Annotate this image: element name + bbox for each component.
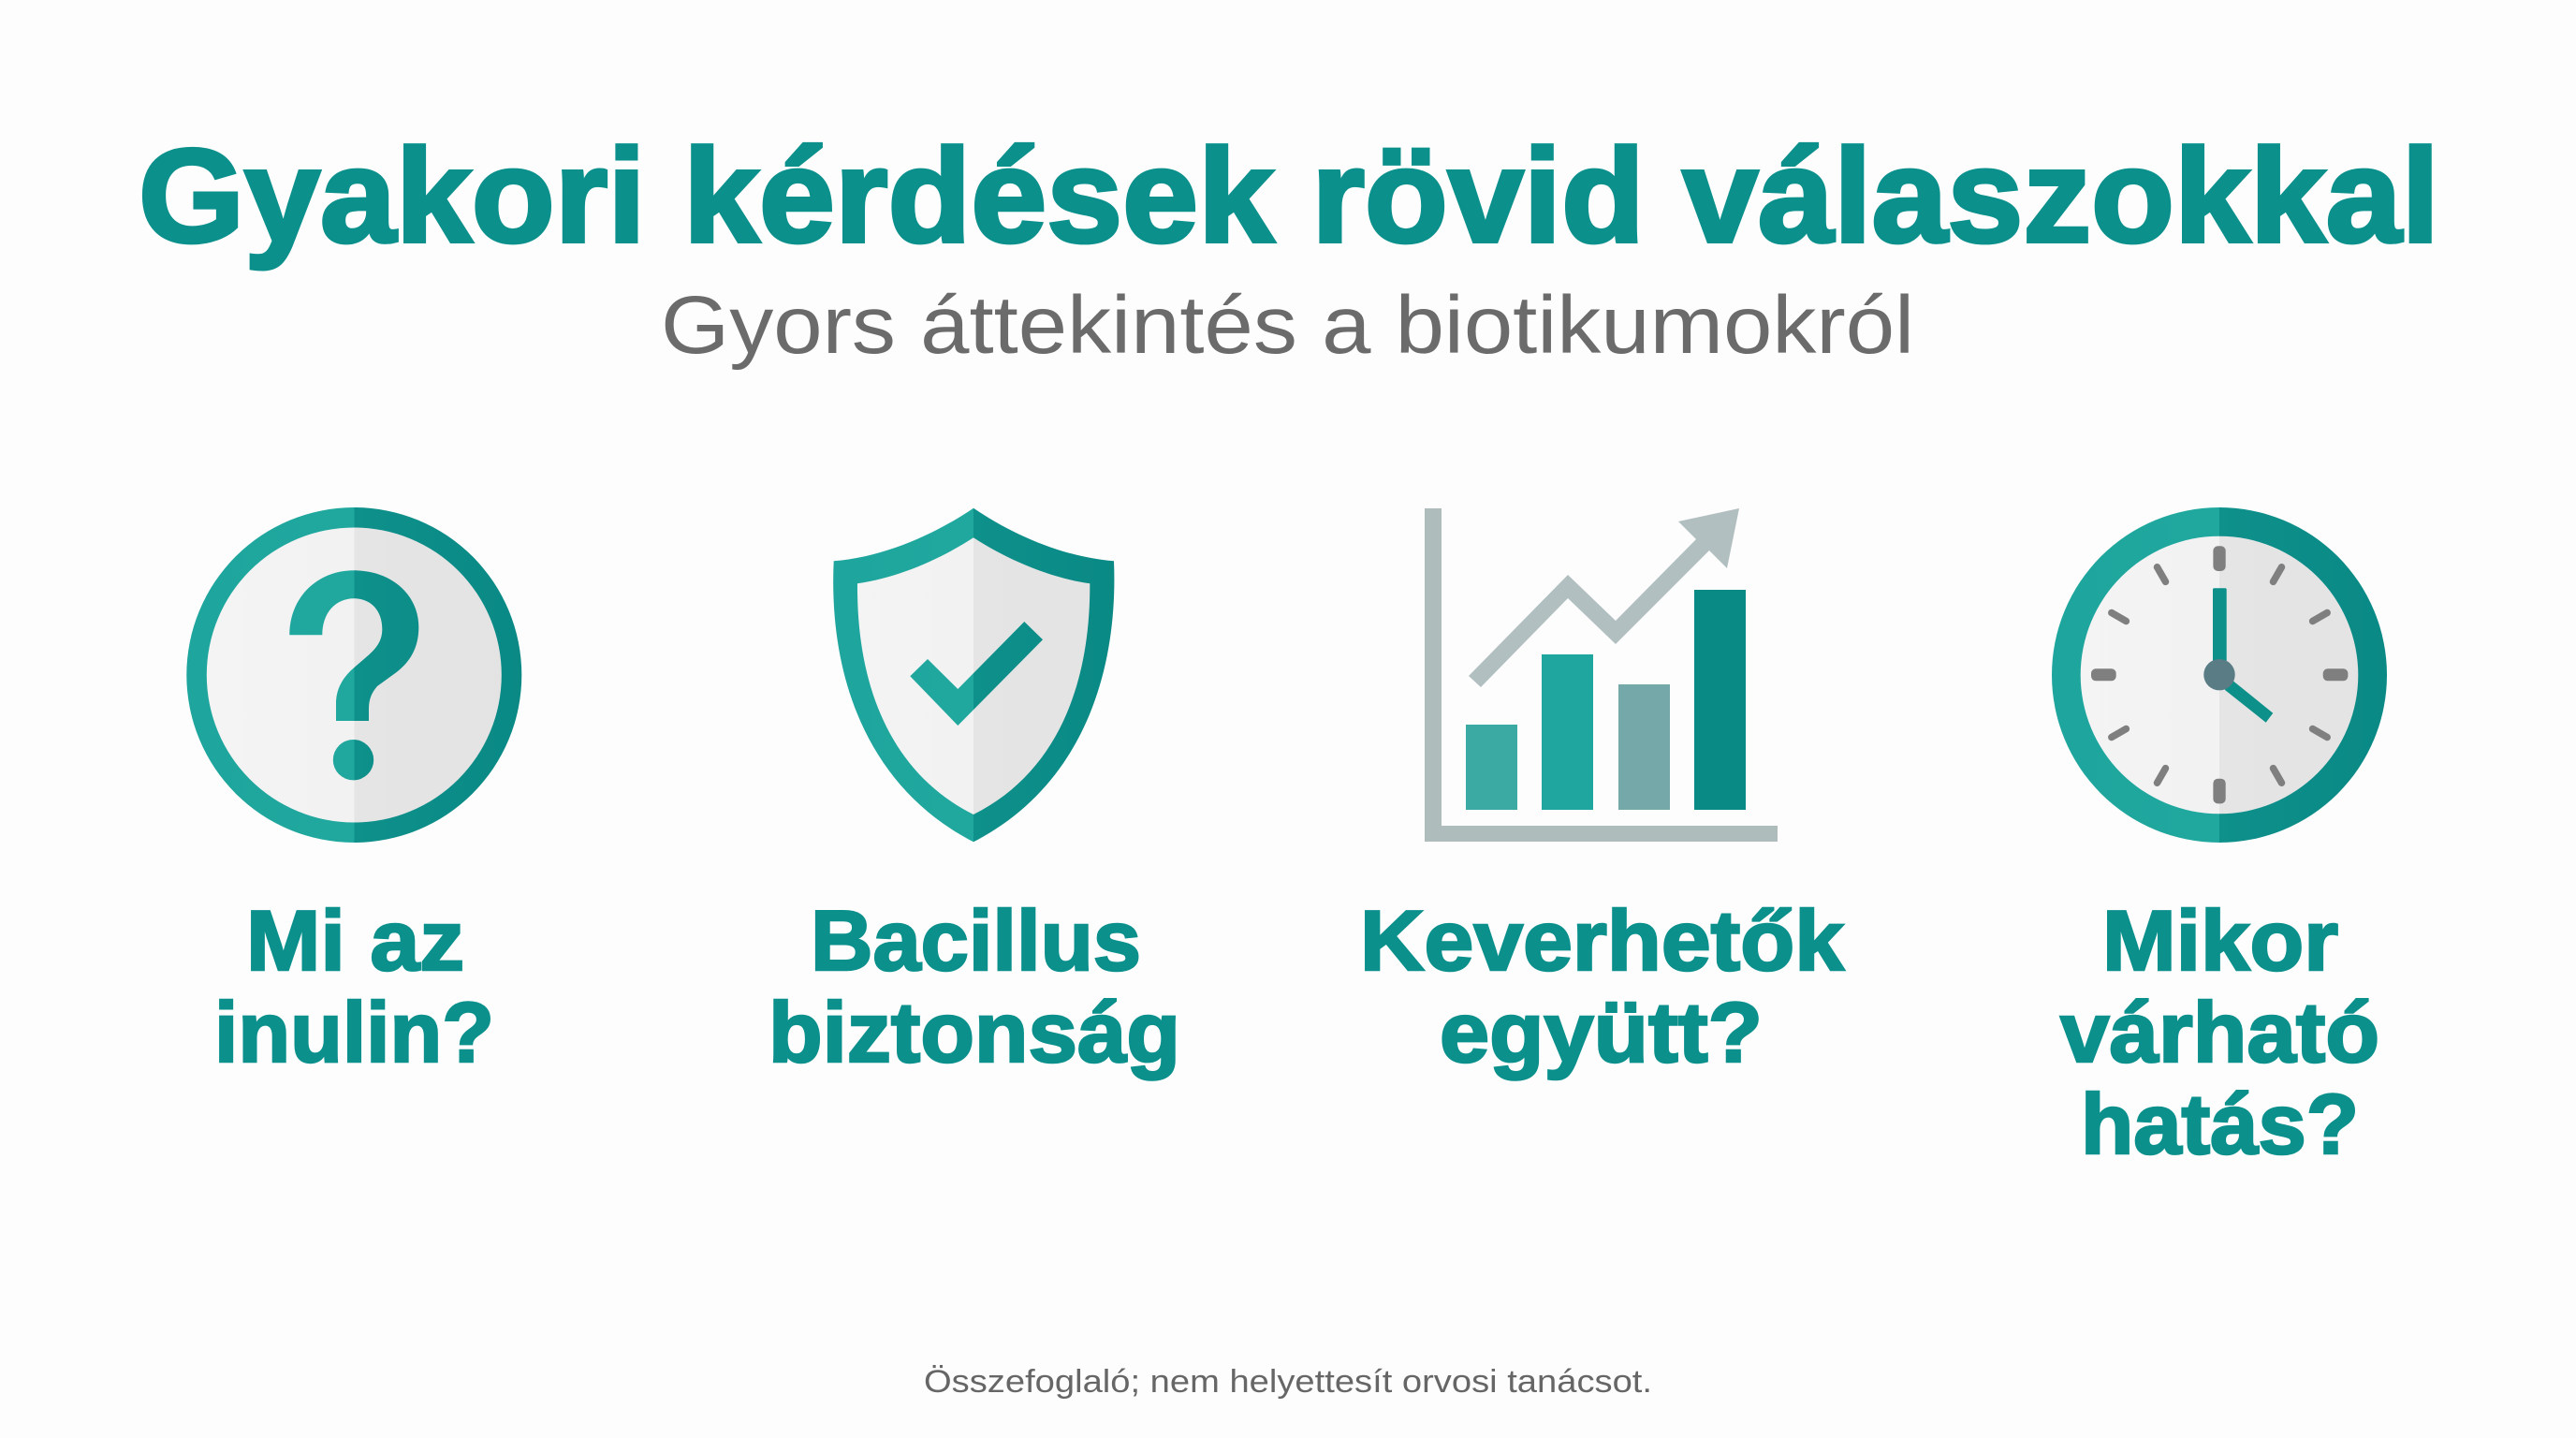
title: Gyakori kérdések rövid válaszokkal: [139, 122, 2439, 271]
panel: Bacillus safety: [768, 508, 1180, 1080]
label: Keverhetők együtt?: Keverhetők: [1360, 894, 1844, 989]
label: Mikor várható hatás?: [2060, 894, 2379, 1172]
label: Bacillus biztonság: Bacillus: [811, 894, 1141, 989]
label: Mi az inulin?: Mi az: [246, 894, 464, 989]
label: Mikor várható hatás?: hatás?: [2081, 1078, 2359, 1172]
label: Bacillus biztonság: [768, 894, 1180, 1080]
label: Mikor várható hatás?: Mikor: [2102, 894, 2338, 989]
chart bars: [1466, 590, 1746, 810]
subtitle: Gyors áttekintés a biotikumokról: [661, 280, 1914, 371]
icon: question mark in circle: [186, 507, 521, 843]
footer disclaimer: Összefoglaló; nem helyettesít orvosi tanácsot.: [924, 1364, 1652, 1400]
trend arrow: [1469, 508, 1739, 687]
label: Mi az inulin?: [214, 894, 494, 1080]
icon: shield with check mark: [833, 508, 1114, 842]
label: Keverhetők együtt?: együtt?: [1440, 986, 1763, 1080]
panel: when is the effect expected: [2052, 507, 2387, 1172]
label: Mikor várható hatás?: várható: [2060, 986, 2379, 1080]
clock hands: [2203, 588, 2273, 723]
icon: clock: [2052, 507, 2387, 843]
chart axes: [1425, 508, 1778, 842]
label: Mi az inulin?: inulin?: [214, 986, 494, 1080]
label: Bacillus biztonság: biztonság: [768, 986, 1180, 1080]
clock ticks: [2091, 546, 2348, 803]
panel: can they be mixed: [1360, 508, 1844, 1080]
label: Keverhetők együtt?: [1360, 894, 1844, 1080]
panel: inulin: [186, 507, 521, 1080]
icon: rising bar chart: [1425, 508, 1778, 842]
